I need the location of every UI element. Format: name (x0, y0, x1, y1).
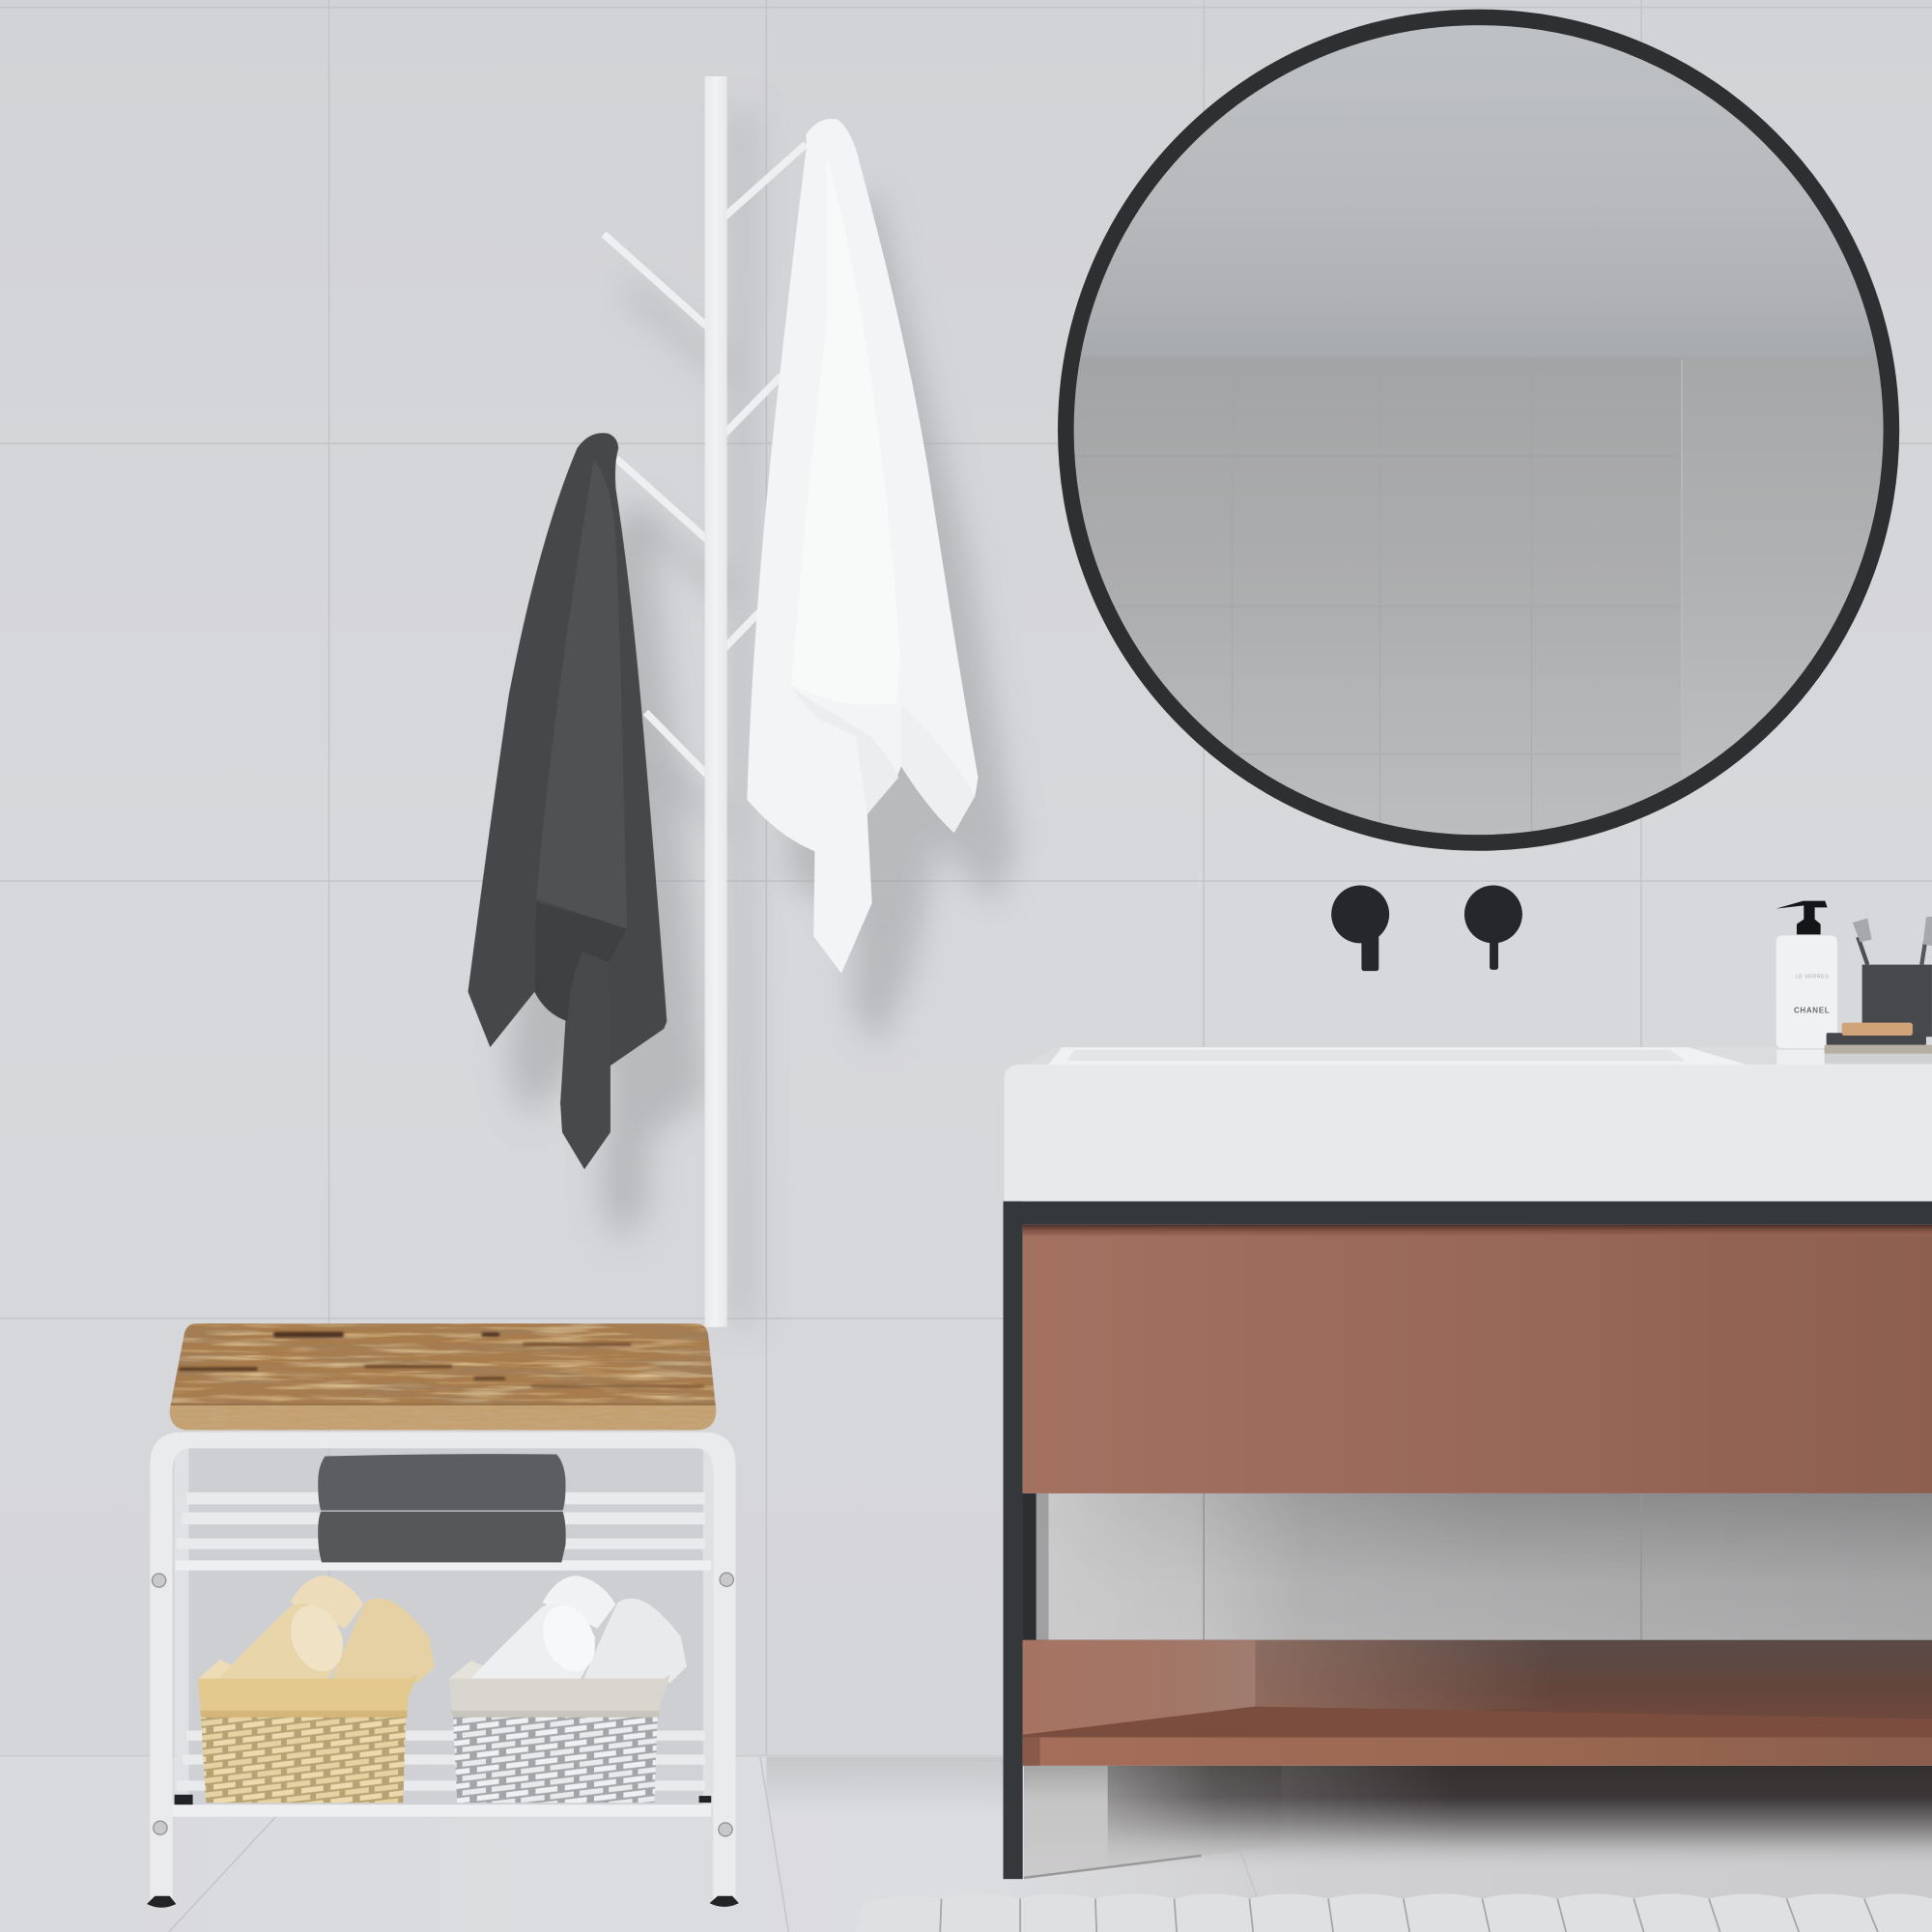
wall shadows of towels and rack (506, 111, 1016, 1324)
open shelf (1023, 1640, 1932, 1766)
lower shoe shelf (173, 1730, 711, 1817)
drawer front (1023, 1225, 1932, 1493)
upper shoe shelf (175, 1448, 713, 1808)
floor shadow under vanity (1024, 1766, 1932, 1878)
folded dark towels (318, 1454, 566, 1562)
bath mat (855, 1893, 1932, 1932)
wall tap handle (1464, 885, 1522, 970)
cup (1862, 965, 1932, 1037)
wall behind vanity opening (1037, 1493, 1932, 1641)
floor (0, 1756, 1932, 1932)
dark towel (468, 433, 667, 1169)
bench screws (152, 1573, 733, 1836)
beige rolled towels (217, 1576, 435, 1683)
wall faucet (1331, 885, 1389, 971)
branches (604, 144, 806, 775)
shelf backdrop shade (188, 1448, 703, 1804)
coat rack pole and branches (604, 76, 806, 1327)
wooden seat (166, 1321, 720, 1433)
bottle (1776, 901, 1837, 1065)
pole (705, 76, 727, 1327)
round mirror (1060, 13, 1897, 850)
white towel (747, 119, 978, 974)
white rolled towels (469, 1576, 687, 1683)
vanity frame (1003, 1202, 1932, 1879)
sink block (1005, 1065, 1932, 1202)
bench feet (147, 1795, 739, 1908)
left basket with beige towels (198, 1576, 435, 1803)
toothbrushes (1853, 917, 1932, 965)
soap and dish (1825, 1023, 1932, 1064)
bench (147, 1321, 739, 1908)
vanity (1003, 1047, 1932, 1879)
bench frame (150, 1433, 735, 1901)
countertop surface (1018, 1047, 1932, 1067)
right basket with white towels (449, 1576, 687, 1803)
bottle: CHANEL (1794, 1006, 1830, 1014)
soap bottle and toothbrush holder (1776, 901, 1932, 1065)
bottle: LE VERRES (1796, 974, 1829, 980)
